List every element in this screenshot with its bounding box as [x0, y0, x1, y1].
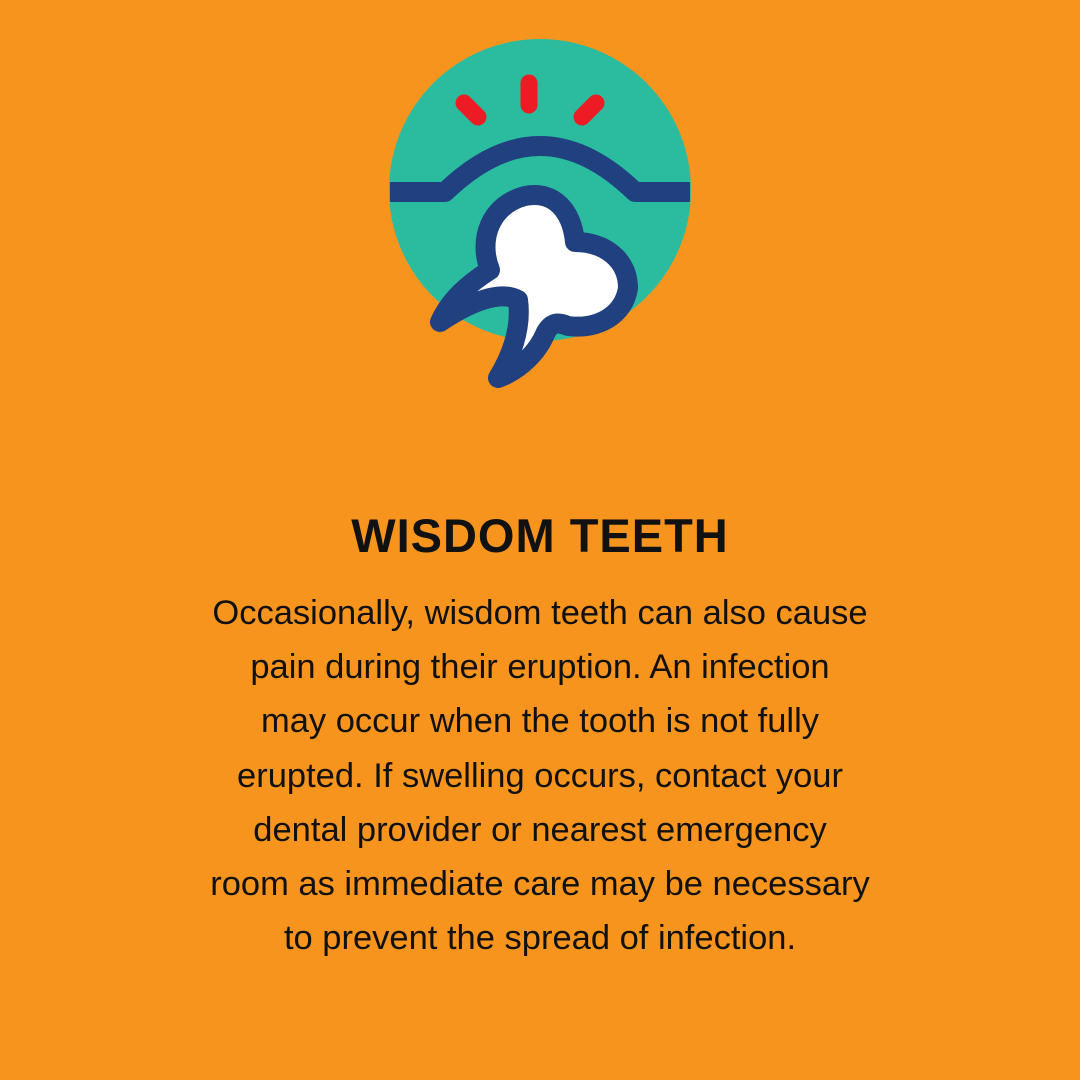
gum line	[390, 146, 690, 192]
body text: dental provider or nearest emergency	[253, 811, 827, 849]
pain rays	[464, 83, 596, 117]
body text	[210, 594, 870, 957]
icon: wisdom tooth in circle	[389, 39, 691, 388]
body text: to prevent the spread of infection.	[284, 919, 796, 957]
body text: Occasionally, wisdom teeth can also cause	[212, 594, 868, 632]
body text: erupted. If swelling occurs, contact your	[237, 757, 843, 795]
icon background circle	[389, 39, 691, 341]
body text: room as immediate care may be necessary	[210, 865, 870, 903]
body text: pain during their eruption. An infection	[250, 648, 830, 686]
title: WISDOM TEETH	[351, 509, 729, 562]
body text: may occur when the tooth is not fully	[261, 702, 819, 740]
tooth	[440, 195, 628, 378]
